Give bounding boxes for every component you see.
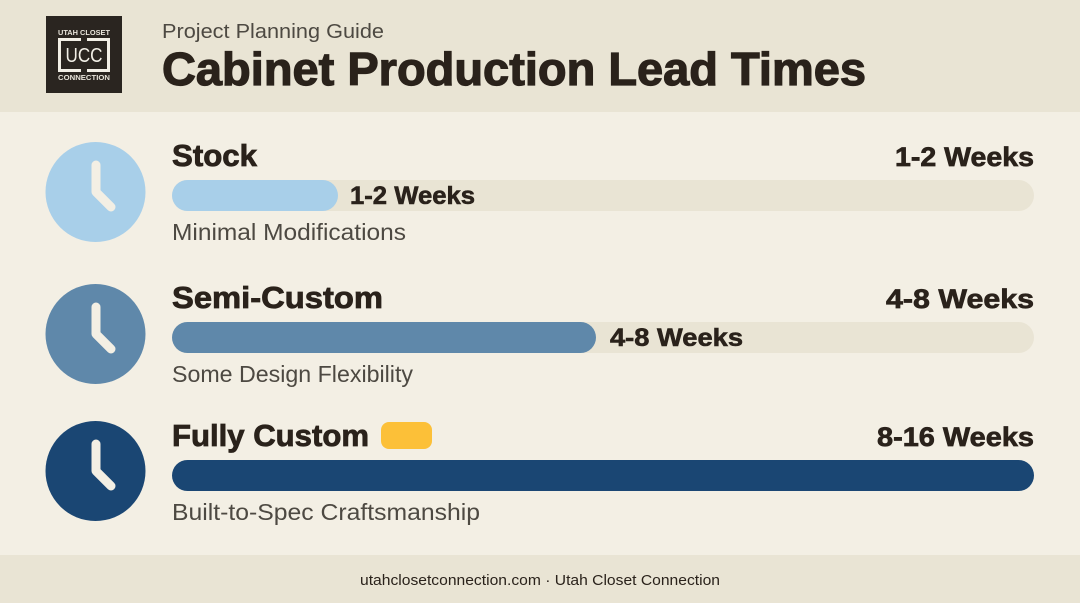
icon: clock mid blue bbox=[46, 284, 146, 384]
progress bar bbox=[172, 180, 1034, 211]
logo: Utah Closet Connection: UTAH CLOSET bbox=[58, 28, 110, 37]
header band bbox=[0, 0, 1080, 112]
bar label: 4-8 Weeks bbox=[610, 324, 743, 352]
row: Fully Custom bbox=[46, 418, 1034, 525]
icon: clock navy bbox=[46, 421, 146, 521]
heading: Stock: Stock bbox=[172, 138, 258, 173]
eyebrow: Project Planning Guide bbox=[162, 21, 384, 43]
duration label: 8-16 Weeks bbox=[877, 422, 1034, 452]
logo: Utah Closet Connection: UCC bbox=[66, 45, 102, 67]
duration label: 4-8 Weeks bbox=[886, 284, 1034, 314]
heading: Fully Custom: Fully Custom bbox=[172, 418, 369, 453]
description: Minimal Modifications bbox=[172, 219, 406, 245]
description: Built-to-Spec Craftsmanship bbox=[172, 499, 480, 525]
description: Some Design Flexibility bbox=[172, 361, 414, 387]
footer text: utahclosetconnection.com · Utah Closet Connection bbox=[360, 572, 720, 589]
logo: Utah Closet Connection: CONNECTION bbox=[58, 73, 110, 82]
row: Semi-Custom bbox=[46, 280, 1034, 387]
progress bar bbox=[172, 322, 1034, 353]
bar label: 1-2 Weeks bbox=[350, 182, 475, 210]
row: Stock bbox=[46, 138, 1034, 245]
duration label: 1-2 Weeks bbox=[895, 142, 1034, 172]
icon: clock light blue bbox=[46, 142, 146, 242]
footer band bbox=[0, 555, 1080, 603]
progress bar bbox=[172, 460, 1034, 491]
logo: Utah Closet Connection bbox=[46, 16, 122, 93]
title: Cabinet Production Lead Times bbox=[162, 43, 866, 95]
heading: Semi-Custom: Semi-Custom bbox=[172, 280, 383, 315]
yellow badge bbox=[381, 422, 432, 449]
